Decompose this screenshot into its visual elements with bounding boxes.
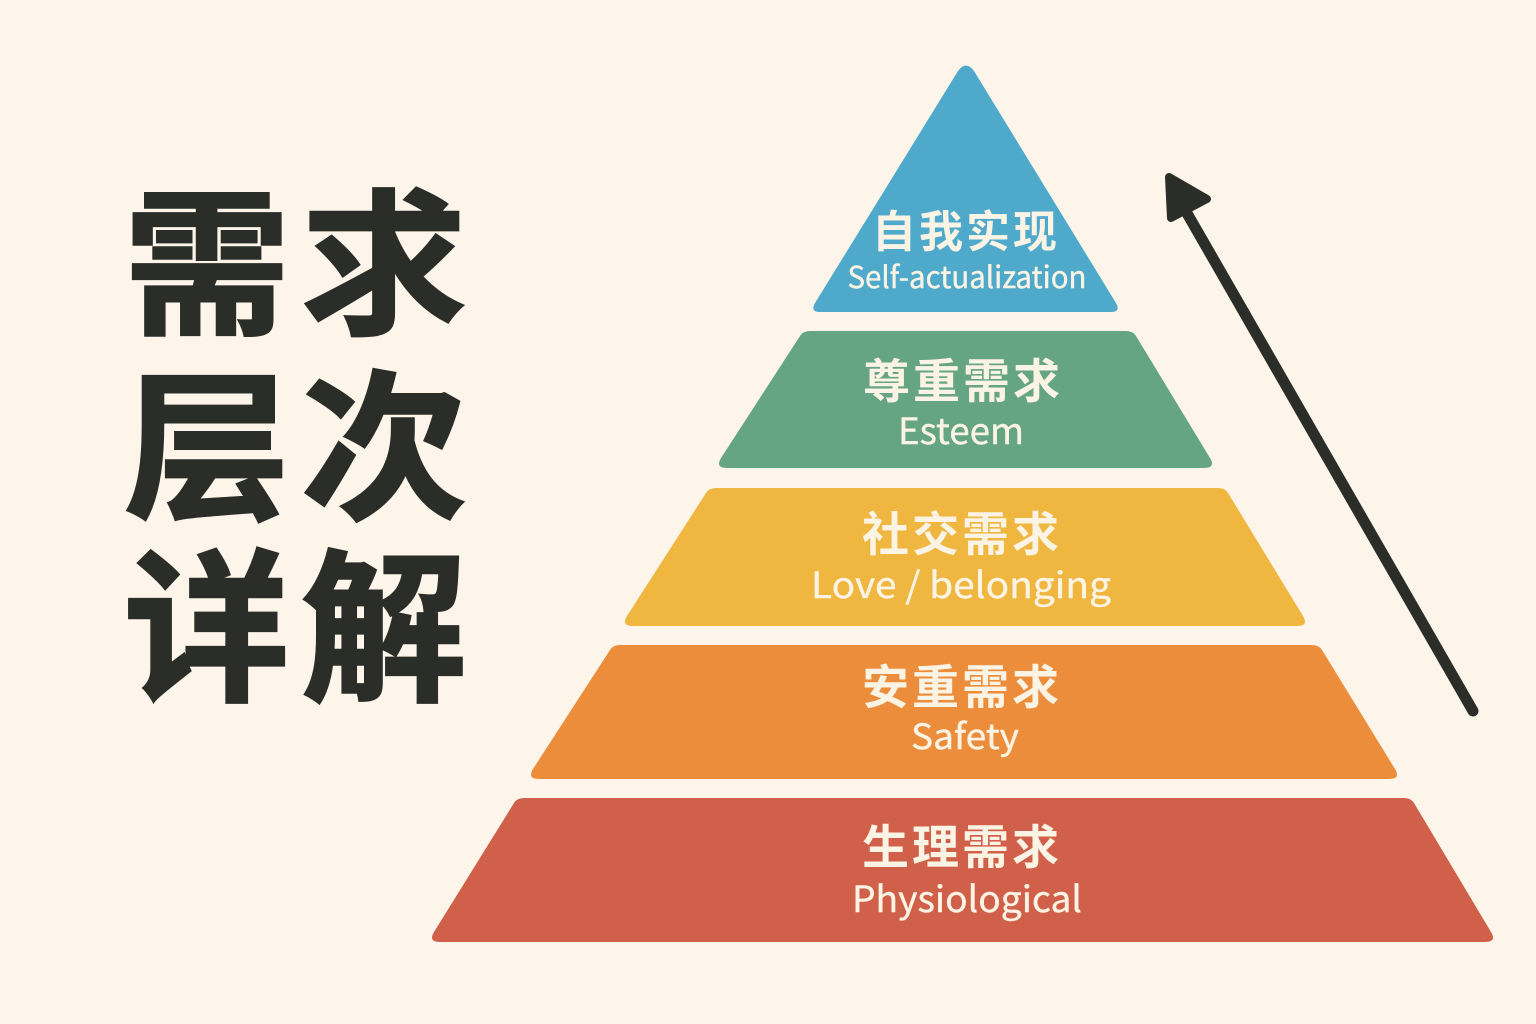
tier: safety [531, 645, 1397, 779]
tier: physiological [432, 798, 1493, 942]
arrow: upward hierarchy [1169, 177, 1473, 711]
title: 层 [124, 320, 290, 553]
tier: self-actualization [813, 66, 1118, 312]
tier: esteem: 尊重需求 [863, 355, 1063, 408]
title: 需 [124, 139, 290, 368]
tier: esteem: Esteem [898, 403, 1024, 455]
tier: physiological: Physiological [852, 871, 1082, 923]
tier: physiological: 生理需求 [862, 821, 1062, 874]
tier: esteem [719, 331, 1212, 468]
tier: love / belonging: Love / belonging [811, 557, 1111, 609]
title: 解 [301, 497, 467, 736]
tier: love / belonging: 社交需求 [862, 508, 1062, 561]
tier: safety: Safety [911, 709, 1019, 760]
title: 次 [301, 320, 467, 553]
pyramid [432, 66, 1493, 942]
title: 求 [301, 139, 467, 368]
tier: self-actualization: Self-actualization [848, 253, 1086, 297]
tier: safety: 安重需求 [862, 661, 1062, 714]
title: 详 [124, 497, 290, 736]
title [124, 139, 467, 736]
tier: self-actualization: 自我实现 [872, 208, 1060, 257]
tier: love / belonging [625, 488, 1305, 626]
